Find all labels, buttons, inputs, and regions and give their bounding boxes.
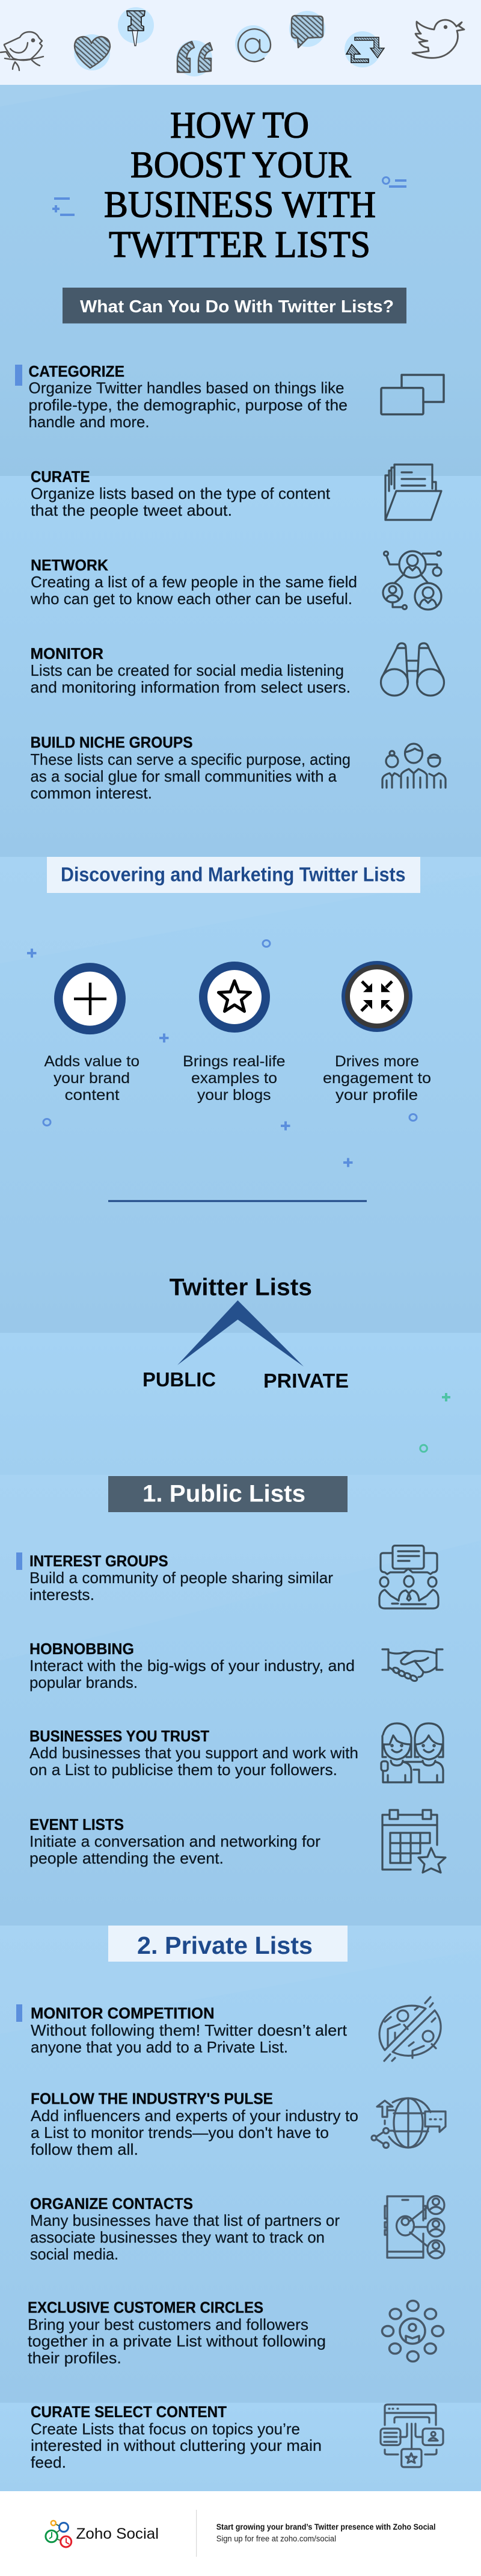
text: monitor xyxy=(30,644,351,696)
text: monitor competition: MONITOR COMPETITION xyxy=(31,2004,215,2022)
text: network: who can get to know each other can be useful. xyxy=(30,590,352,608)
text: follow the industry's pulse: Add influencers and experts of your industry to xyxy=(31,2107,358,2125)
chevron xyxy=(177,1300,304,1367)
icon: two cards xyxy=(381,375,444,415)
text: drives more: your profile xyxy=(335,1087,418,1104)
heading: what can you do xyxy=(63,288,406,324)
accent bar xyxy=(16,2004,22,2022)
text: footer call to action: Sign up for free at zoho.com/social xyxy=(216,2534,336,2544)
text: curate: CURATE xyxy=(31,468,90,486)
text: drives more: Drives more xyxy=(335,1053,419,1070)
heading: discovering and marketing xyxy=(47,857,420,893)
title decoration left xyxy=(52,197,75,216)
text: interest groups: Build a community of people sharing similar xyxy=(29,1569,333,1587)
text: interest groups: INTEREST GROUPS xyxy=(29,1552,168,1570)
text: network: NETWORK xyxy=(31,556,108,574)
panel: public lists xyxy=(16,1546,446,1873)
icon: binoculars xyxy=(381,643,444,696)
title: BOOST YOUR xyxy=(130,145,352,186)
text: categorize: profile-type, the demographic, purpose of the xyxy=(29,396,348,414)
text: businesses you trust xyxy=(29,1727,358,1779)
text: adds value: content xyxy=(65,1087,120,1104)
diagram: twitter lists split: PUBLIC xyxy=(142,1368,216,1391)
text: adds value: Adds value to xyxy=(44,1053,139,1070)
title: BUSINESS WITH xyxy=(104,185,376,226)
text: businesses you trust: on a List to publicise them to your followers. xyxy=(29,1761,337,1779)
text: build niche groups: BUILD NICHE GROUPS xyxy=(30,733,192,751)
text: categorize: Organize Twitter handles based on things like xyxy=(29,378,344,397)
panel: private lists xyxy=(16,1997,446,2471)
logo: zoho social: Zoho Social xyxy=(76,2525,159,2542)
text: exclusive customer circles xyxy=(28,2299,326,2367)
text: brings real-life xyxy=(183,1053,285,1104)
top banner xyxy=(0,0,481,85)
accent bar xyxy=(15,365,22,386)
text: event lists: Initiate a conversation and networking for xyxy=(29,1832,320,1850)
title: HOW TO xyxy=(170,105,309,146)
text: organize contacts: Many businesses have that list of partners or xyxy=(30,2211,340,2229)
text: follow the industry's pulse: FOLLOW THE INDUSTRY'S PULSE xyxy=(31,2089,273,2107)
text: exclusive customer circles: together in a private List without following xyxy=(28,2332,326,2350)
text: adds value xyxy=(44,1053,139,1104)
text: brings real-life: your blogs xyxy=(197,1087,271,1104)
text: event lists xyxy=(29,1815,320,1867)
text: curate select content: interested in without cluttering your main xyxy=(31,2436,322,2454)
icon: phone with contacts xyxy=(385,2196,444,2258)
text: curate xyxy=(31,468,331,519)
diagram: twitter lists split: Twitter Lists xyxy=(170,1274,312,1301)
icon: handshake xyxy=(382,1649,443,1682)
text: monitor competition xyxy=(31,2004,348,2056)
text: brings real-life: examples to xyxy=(191,1070,277,1087)
heading: private lists: 2. Private Lists xyxy=(137,1932,313,1959)
text: monitor competition: anyone that you add to a Private List. xyxy=(31,2038,288,2056)
logo: zoho social xyxy=(46,2521,159,2547)
text: curate: that the people tweet about. xyxy=(31,501,232,519)
text: hobnobbing: popular brands. xyxy=(29,1673,138,1691)
text: drives more: engagement to xyxy=(323,1070,431,1087)
heading: public lists: 1. Public Lists xyxy=(142,1480,305,1507)
text: network: Creating a list of a few people in the same field xyxy=(31,573,357,591)
heading: public lists xyxy=(108,1476,348,1512)
icon: meeting xyxy=(379,1546,438,1608)
text: exclusive customer circles: Bring your best customers and followers xyxy=(28,2315,308,2334)
text: network xyxy=(30,556,357,608)
icon: two people xyxy=(381,1723,443,1782)
text: brings real-life: Brings real-life xyxy=(183,1053,285,1070)
text: curate select content xyxy=(31,2403,322,2471)
text: build niche groups: common interest. xyxy=(30,784,152,802)
panel: benefit 3 xyxy=(323,961,431,1104)
title: TWITTER LISTS xyxy=(109,224,370,265)
icon: content window xyxy=(381,2405,443,2467)
text: curate select content: feed. xyxy=(31,2453,66,2471)
icon: push pin xyxy=(118,7,154,46)
icon: group of people xyxy=(382,744,446,788)
text: follow the industry's pulse: a List to monitor trends—you don't have to xyxy=(31,2124,329,2142)
heading: private lists xyxy=(108,1926,348,1962)
diagram: twitter lists split: PRIVATE xyxy=(263,1370,349,1392)
footer xyxy=(0,2491,481,2576)
text: organize contacts: ORGANIZE CONTACTS xyxy=(30,2195,193,2213)
decoration: green marks xyxy=(420,1393,450,1452)
text: exclusive customer circles: EXCLUSIVE CUSTOMER CIRCLES xyxy=(28,2299,263,2317)
text: interest groups xyxy=(29,1552,333,1604)
diagram: twitter lists split xyxy=(142,1274,349,1392)
text: build niche groups xyxy=(30,733,351,802)
panel: what you can do xyxy=(15,362,446,802)
accent bar xyxy=(16,1552,22,1570)
icon: heart xyxy=(74,34,110,70)
text: exclusive customer circles: their profiles. xyxy=(28,2349,121,2367)
panel: benefit 1 xyxy=(44,963,139,1104)
title decoration right xyxy=(382,177,406,188)
text: monitor: and monitoring information from select users. xyxy=(30,678,351,696)
text: monitor: Lists can be created for social media listening xyxy=(30,661,344,679)
text: follow the industry's pulse: follow them all. xyxy=(31,2140,138,2158)
icon: hidden competitors xyxy=(379,1997,441,2061)
text: organize contacts: associate businesses they want to track on xyxy=(30,2228,325,2246)
text: drives more xyxy=(323,1053,431,1104)
heading: what can you do: What Can You Do With Twitter Lists? xyxy=(80,297,394,317)
icon: plus in circle xyxy=(54,963,126,1034)
decoration: plus and ring marks xyxy=(27,940,417,1167)
text: organize contacts xyxy=(30,2195,340,2263)
text: hobnobbing: Interact with the big-wigs of your industry, and xyxy=(29,1657,355,1675)
text: monitor competition: Without following them! Twitter doesn’t alert xyxy=(31,2021,348,2039)
icon: folder xyxy=(385,465,441,520)
text: footer call to action xyxy=(216,2522,435,2544)
panel: benefit 2 xyxy=(183,962,285,1104)
icon: network xyxy=(383,551,441,610)
text: interest groups: interests. xyxy=(29,1586,94,1604)
icon: calendar with star xyxy=(382,1810,446,1873)
text: curate select content: Create Lists that focus on topics you’re xyxy=(31,2420,300,2438)
text: categorize: CATEGORIZE xyxy=(29,362,124,380)
icon: quote marks xyxy=(176,40,212,76)
icon: at sign xyxy=(235,25,271,61)
title xyxy=(104,105,376,265)
text: organize contacts: social media. xyxy=(30,2245,118,2263)
text: hobnobbing xyxy=(29,1640,355,1691)
icon: customer circles xyxy=(382,2301,444,2361)
icon: star in circle xyxy=(199,962,270,1033)
icon: compress arrows in circle xyxy=(342,961,412,1032)
text: businesses you trust: Add businesses that you support and work with xyxy=(29,1744,358,1762)
text: curate select content: CURATE SELECT CONTENT xyxy=(31,2403,227,2421)
icon: perched bird xyxy=(1,32,43,70)
text: businesses you trust: BUSINESSES YOU TRUST xyxy=(29,1727,209,1745)
text: categorize: handle and more. xyxy=(29,413,149,431)
icon: twitter bird xyxy=(412,20,464,58)
text: build niche groups: as a social glue for small communities with a xyxy=(30,767,337,785)
icon: globe with share xyxy=(372,2098,446,2148)
text: adds value: your brand xyxy=(54,1070,130,1087)
text: monitor: MONITOR xyxy=(30,644,103,663)
text: footer call to action: Start growing your brand’s Twitter presence with Zoho Social xyxy=(216,2522,435,2531)
icon: retweet arrows xyxy=(345,31,384,67)
text: curate: Organize lists based on the type of content xyxy=(31,484,331,502)
text: hobnobbing: HOBNOBBING xyxy=(29,1640,134,1658)
heading: discovering and marketing: Discovering and Marketing Twitter Lists xyxy=(61,863,405,885)
text: categorize xyxy=(29,362,348,431)
text: event lists: people attending the event. xyxy=(29,1849,224,1867)
icon: speech bubble xyxy=(289,11,325,48)
text: build niche groups: These lists can serve a specific purpose, acting xyxy=(30,750,351,768)
text: follow the industry's pulse xyxy=(31,2089,358,2158)
text: event lists: EVENT LISTS xyxy=(29,1815,124,1833)
